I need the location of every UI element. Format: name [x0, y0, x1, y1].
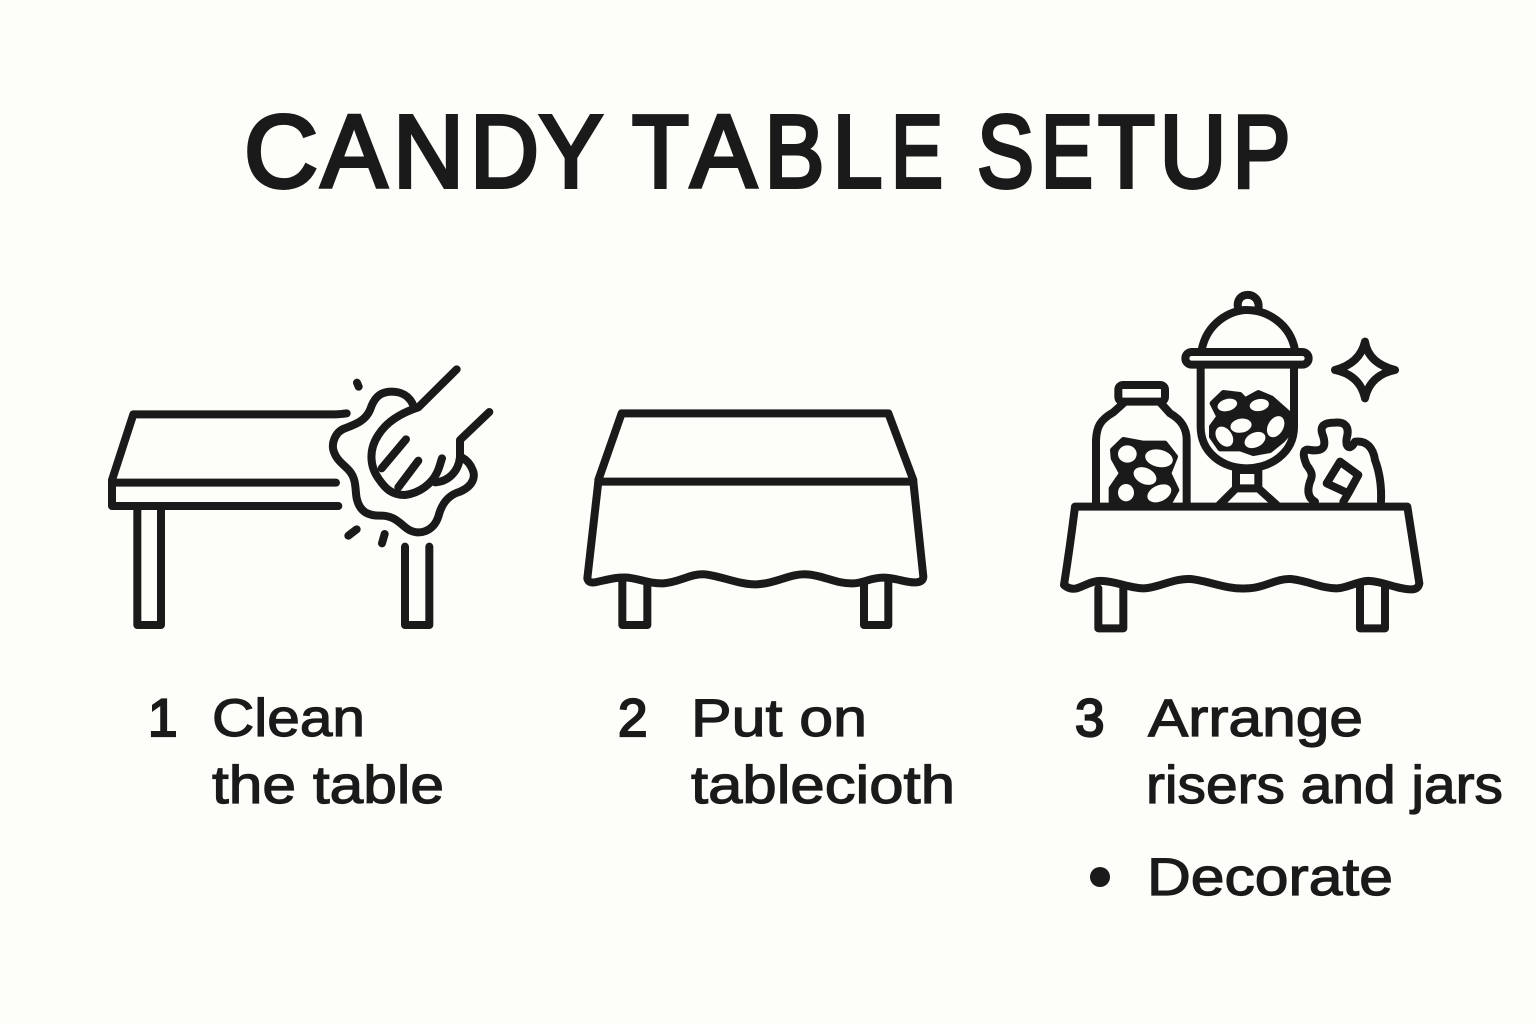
title: T [632, 94, 689, 209]
motion marks [348, 383, 385, 543]
decorated table [1064, 507, 1419, 589]
icon: table with tablecloth [587, 413, 923, 625]
title [244, 94, 1290, 209]
title: Y [539, 94, 603, 209]
title: E [891, 94, 943, 209]
title: B [764, 94, 824, 209]
step 3 label: Arrange [1148, 689, 1363, 748]
step 3 label: risers and jars [1146, 756, 1503, 815]
step 3 label [1075, 689, 1503, 815]
step 2 label: tablecioth [691, 756, 955, 815]
step 1 label: the table [212, 756, 444, 815]
step 2 label [618, 689, 955, 815]
title: L [832, 94, 882, 209]
title: S [977, 94, 1034, 209]
table legs [1098, 586, 1385, 628]
title: U [1160, 94, 1226, 209]
title: D [470, 94, 539, 209]
tall apothecary jar [1185, 295, 1309, 505]
table top and apron [112, 413, 347, 506]
title: E [1041, 94, 1093, 209]
cloth skirt [587, 482, 923, 584]
candy bag [1304, 423, 1381, 502]
step 1 label: 1 [148, 689, 177, 748]
title: A [321, 94, 387, 209]
table top [598, 413, 913, 482]
step 3 label: 3 [1075, 689, 1104, 748]
title: C [244, 94, 318, 209]
step 2 label: 2 [618, 689, 647, 748]
step 1 label [148, 689, 444, 815]
sparkle [1335, 342, 1395, 398]
title: T [1098, 94, 1155, 209]
decorate label: Decorate [1147, 848, 1393, 907]
bullet [1090, 867, 1110, 887]
hand [371, 369, 489, 495]
icon: decorated candy table [1064, 295, 1419, 628]
step 1 label: Clean [212, 689, 365, 748]
title: P [1232, 94, 1290, 209]
small jar [1096, 385, 1187, 506]
title: A [690, 94, 757, 209]
step 2 label: Put on [691, 689, 867, 748]
icon: wiping the table [112, 369, 489, 625]
cloth [333, 392, 474, 532]
table legs [622, 580, 888, 625]
title: N [393, 94, 464, 209]
table legs [137, 507, 429, 625]
